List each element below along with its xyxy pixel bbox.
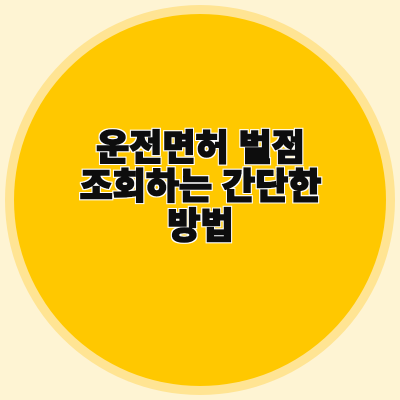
title: 운전면허 벌점 — [96, 127, 305, 168]
title — [80, 127, 321, 246]
title: 조회하는 간단한 — [80, 166, 321, 206]
title: 방법 — [167, 205, 234, 246]
